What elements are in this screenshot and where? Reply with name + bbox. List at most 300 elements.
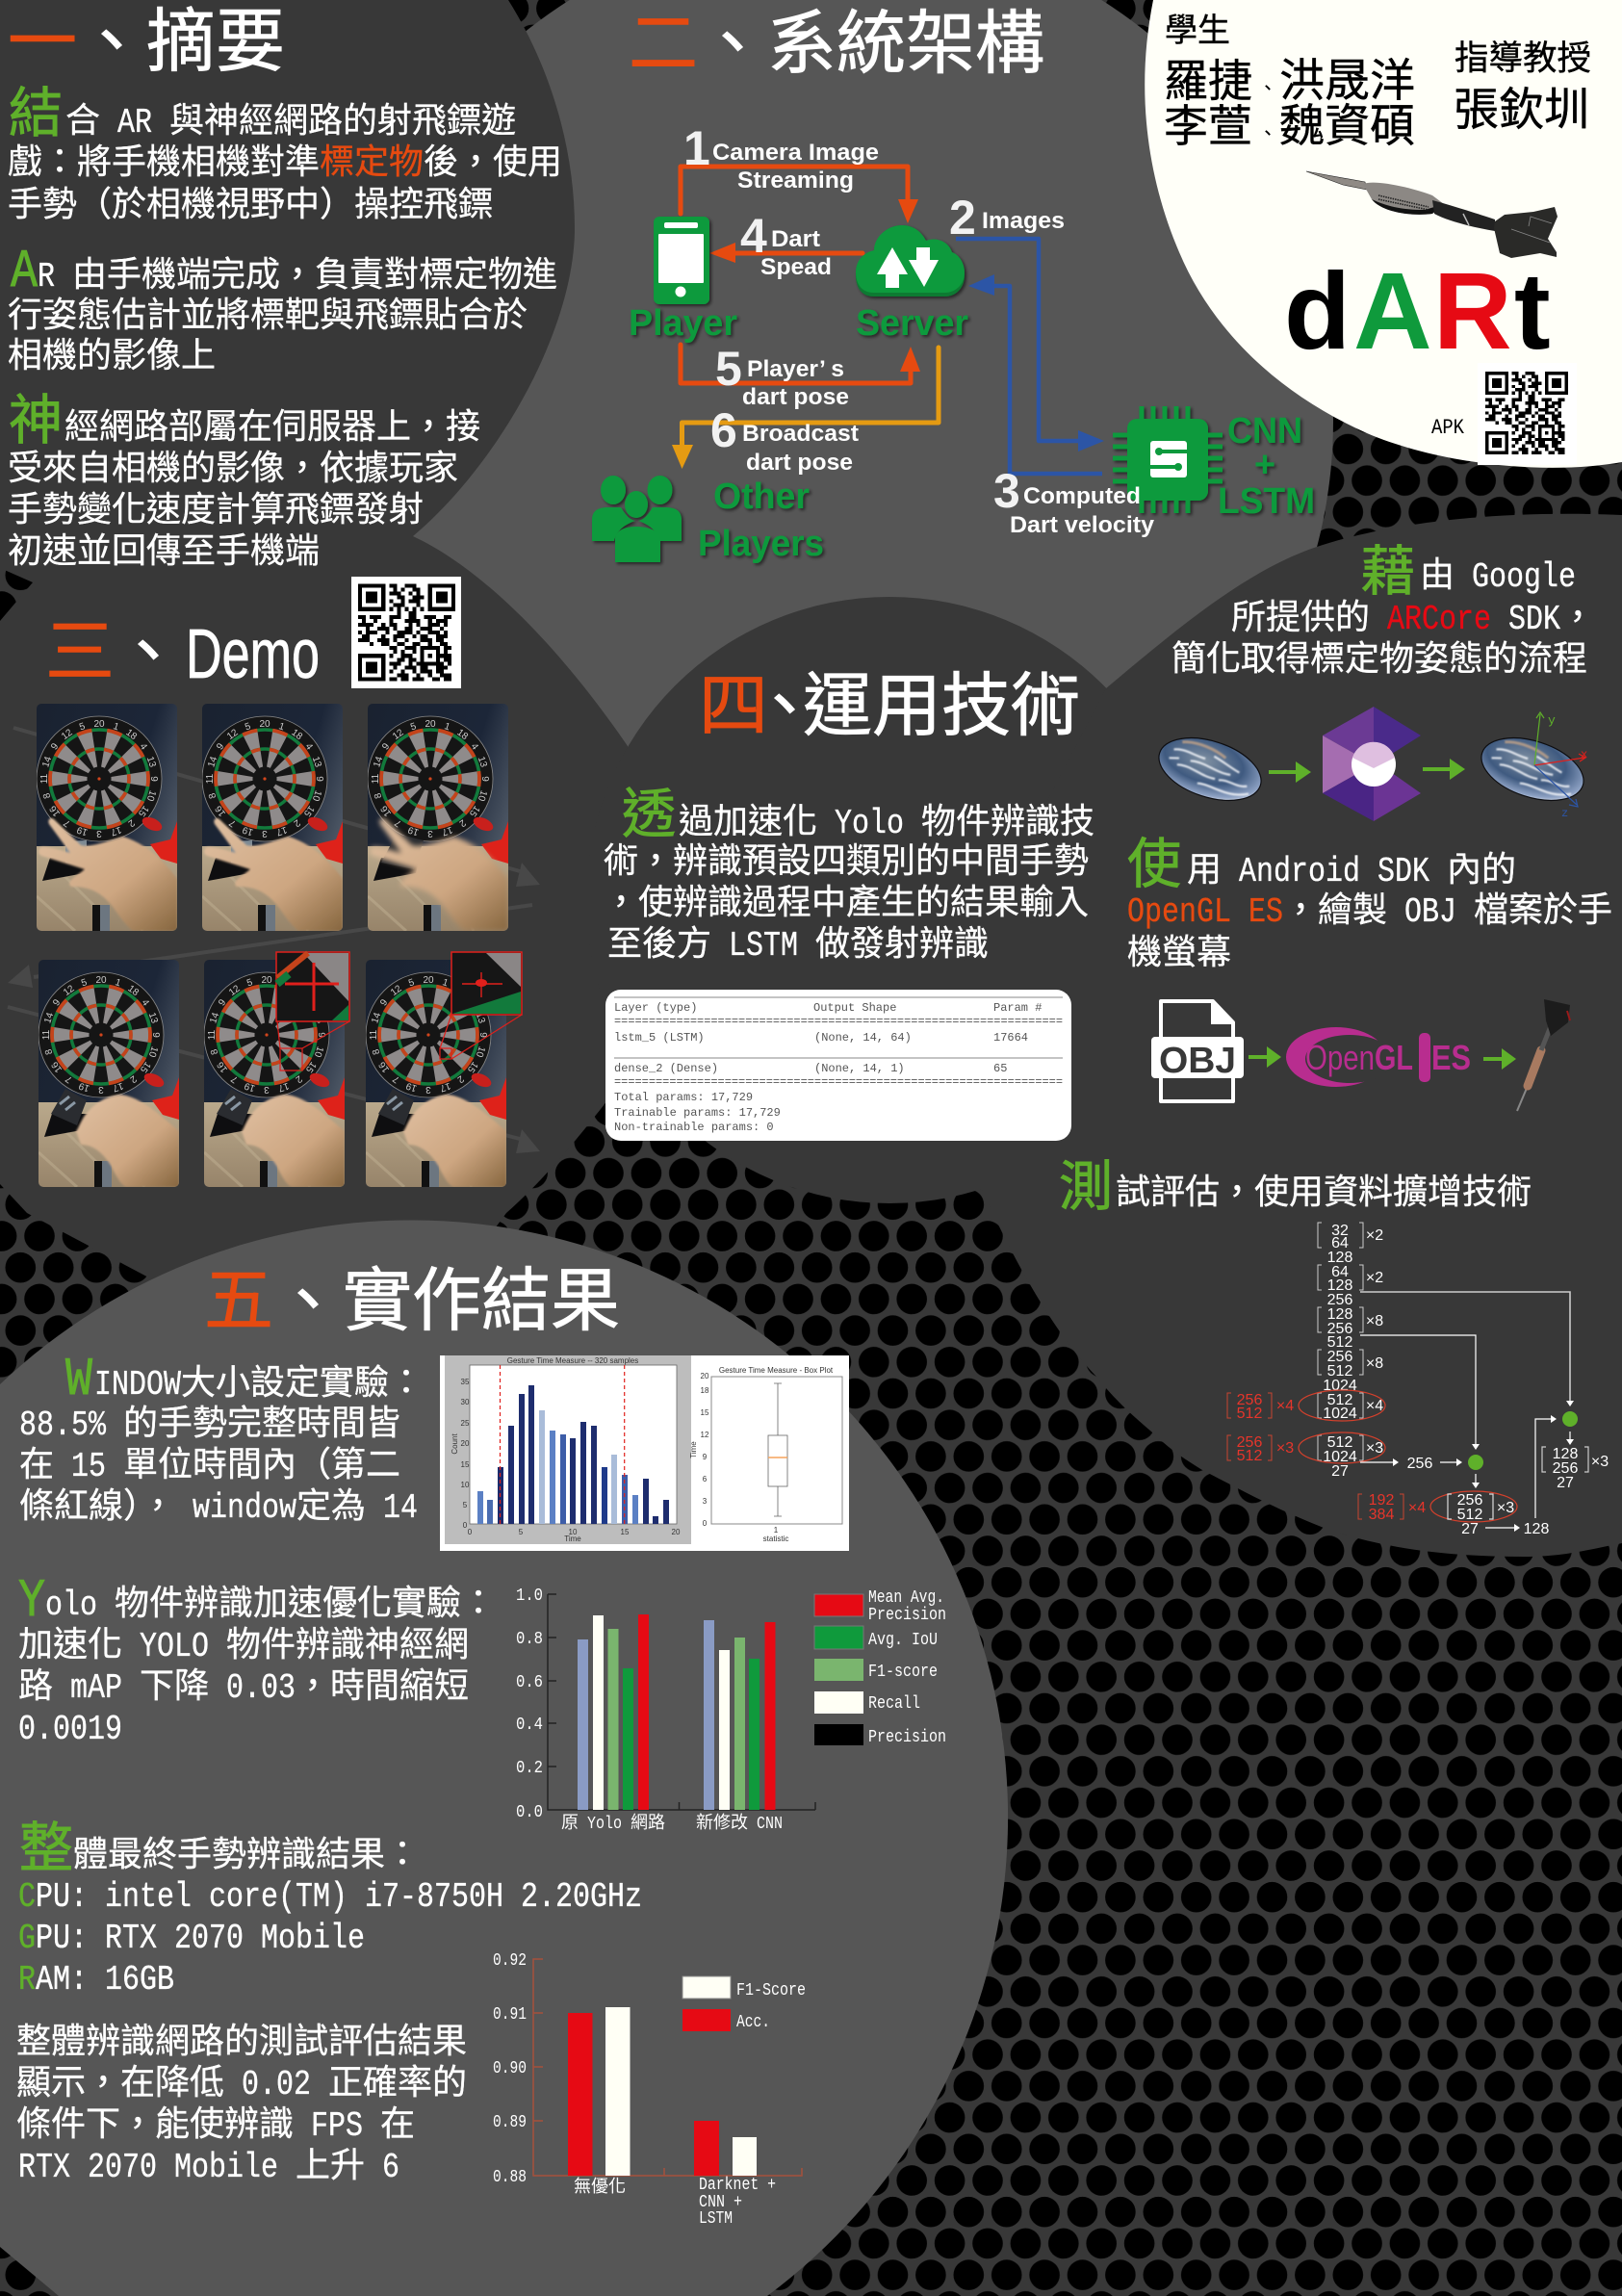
table: LSTM model summary: lstm_5 (LSTM)	[614, 1031, 705, 1045]
text block: OpenGL ES: OpenGL ES	[1127, 892, 1283, 932]
bar chart: overall evaluation: LSTM	[699, 2209, 733, 2229]
text block: window experiment: 定為	[296, 1486, 366, 1528]
table: LSTM model summary: 17664	[993, 1031, 1028, 1045]
bar chart: Yolo comparison	[516, 1587, 946, 1834]
modified layers in red: 256	[1237, 1434, 1262, 1451]
icon: phone player	[654, 217, 709, 304]
team: students: 羅捷	[1164, 59, 1252, 110]
bar chart: Yolo comparison: Precision	[868, 1728, 946, 1747]
title: abstract: 一、摘要	[8, 6, 285, 87]
modified layers in red	[1227, 1390, 1517, 1523]
text block: final results: 上升	[296, 2147, 365, 2187]
text block: abstract: 手勢（於相機視野中）操控飛鏢	[8, 185, 493, 226]
branch numbers: 256	[1457, 1492, 1482, 1509]
text block: ARCore: 藉	[1361, 544, 1415, 606]
logo: ARCore	[1323, 707, 1421, 821]
labels: diagram step captions: dart pose	[742, 384, 849, 410]
box plot: gesture time: Time	[689, 1441, 698, 1458]
text block: Yolo experiment: 下降	[140, 1666, 209, 1708]
text block: final results: 顯示，在降低	[16, 2063, 224, 2104]
text block: abstract: 結	[9, 86, 63, 148]
backbone numbers: ×8	[1366, 1355, 1383, 1372]
labels: diagram step captions: Dart velocity	[1010, 512, 1155, 538]
branch numbers: 27	[1461, 1521, 1479, 1537]
bar chart: overall evaluation: 0.90	[493, 2059, 527, 2078]
modified layers in red: ×3	[1276, 1440, 1294, 1457]
text block: window experiment: 88.5%	[19, 1406, 106, 1445]
text block: abstract: 行姿態估計並將標靶與飛鏢貼合於	[8, 296, 528, 337]
text block: final results: 正確率的	[328, 2063, 467, 2104]
modified layers in red: ×4	[1408, 1500, 1426, 1516]
icon: cloud server	[856, 225, 965, 297]
text block: final results: FPS	[311, 2106, 363, 2146]
arrow: player dart pose	[681, 345, 920, 383]
labels: diagram nodes: Other	[713, 477, 810, 517]
bar chart: Yolo comparison: 0.0	[516, 1803, 543, 1822]
text block: final results: 整體辨識網路的測試評估結果	[16, 2022, 467, 2063]
text block: final results: AM: 16GB	[36, 1960, 174, 1999]
team: advisor: 張欽圳	[1454, 87, 1589, 140]
table: LSTM model summary: Non-trainable params: 0	[614, 1121, 774, 1134]
backbone numbers: 1024	[1323, 1378, 1357, 1394]
arrow: to OpenGL	[1249, 1046, 1281, 1068]
text block: final results: PU: RTX 2070 Mobile	[36, 1919, 365, 1958]
text block: final results: R	[18, 1960, 36, 1999]
text block: Yolo experiment: YOLO	[140, 1627, 209, 1666]
arrow: to pose result	[1423, 759, 1465, 780]
text block: window experiment: 大小設定實驗：	[181, 1363, 424, 1405]
text block: data augmentation	[1059, 1159, 1532, 1222]
box plot: gesture time: 6	[703, 1475, 708, 1483]
text block: Yolo experiment: 0.03	[226, 1668, 296, 1708]
team: advisor: 指導教授	[1455, 39, 1591, 80]
backbone numbers: 64	[1331, 1264, 1349, 1280]
bar chart: Yolo comparison: Avg. IoU	[868, 1631, 938, 1650]
bar chart: gesture time histogram: 35	[461, 1378, 470, 1386]
branch numbers: ×3	[1497, 1500, 1514, 1516]
text block: abstract	[8, 86, 562, 573]
icon: chip network	[1113, 406, 1223, 513]
chart image: gesture time measure	[440, 1355, 849, 1551]
team: advisor	[1454, 39, 1591, 140]
bar chart: Yolo comparison: Precision	[868, 1606, 946, 1625]
text block: ARCore: Google	[1472, 557, 1576, 597]
image: earth with axes: y	[1548, 713, 1556, 728]
bar chart: gesture time histogram: 0	[463, 1521, 468, 1530]
text block: final results: G	[18, 1919, 36, 1958]
text block: Yolo acceleration: LSTM	[729, 926, 798, 966]
text block: OpenGL ES	[1127, 837, 1612, 974]
flow: OBJ rendering	[1151, 999, 1570, 1111]
text block: window experiment: 14	[383, 1488, 418, 1528]
text block: Yolo experiment: 物件辨識神經網	[226, 1625, 469, 1666]
text block: Yolo experiment: 0.0019	[18, 1710, 122, 1749]
backbone numbers: 64	[1331, 1235, 1349, 1251]
backbone numbers: 512	[1327, 1392, 1352, 1408]
text block: OpenGL ES: 檔案於手	[1474, 890, 1612, 932]
bar chart: Yolo comparison: F1-score	[868, 1663, 938, 1682]
text block: abstract: 由手機端完成，負責對標定物進	[72, 255, 557, 297]
logo: dARt: A	[1353, 250, 1432, 372]
image: earth with axes	[1474, 712, 1591, 820]
title: applied technology: 四	[699, 672, 768, 751]
text block: window experiment: 單位時間內（第二	[123, 1445, 400, 1486]
text block: ARCore: 所提供的	[1231, 598, 1370, 639]
labels: diagram nodes	[629, 303, 1315, 564]
text block: window experiment: 的手勢完整時間皆	[123, 1404, 400, 1445]
title: applied technology: 運用技術	[803, 671, 1080, 751]
team: students: 、	[1259, 81, 1276, 100]
text block: Yolo acceleration: 物件辨識技	[921, 802, 1094, 843]
text block: abstract: R	[38, 257, 55, 297]
backbone numbers: 256	[1327, 1292, 1352, 1308]
panel: system architecture background	[338, 0, 1333, 918]
box plot: gesture time: statistic	[763, 1535, 788, 1543]
labels: diagram step captions: dart pose	[746, 450, 853, 476]
labels: diagram step numbers: 4	[740, 209, 767, 263]
table: LSTM model summary: Output Shape	[813, 1001, 896, 1015]
text block: OpenGL ES: 內的	[1447, 850, 1516, 891]
text block: window experiment: 15	[71, 1447, 106, 1486]
bar chart: gesture time histogram: Time	[564, 1535, 581, 1543]
box plot: gesture time: 12	[701, 1431, 709, 1439]
image: dart	[1306, 171, 1558, 258]
table: LSTM model summary: Total params: 17,729	[614, 1091, 753, 1104]
text block: final results: C	[18, 1877, 36, 1917]
text block: abstract: 相機的影像上	[8, 336, 216, 377]
logo: dARt: R	[1433, 250, 1512, 372]
backbone numbers: 512	[1327, 1434, 1352, 1451]
text block: Yolo experiment: olo	[45, 1586, 97, 1625]
labels: diagram step captions: Dart	[771, 226, 820, 252]
text block: abstract: 與神經網路的射飛鏢遊	[169, 101, 516, 142]
text block: OpenGL ES: 用	[1187, 852, 1222, 891]
bar chart: gesture time histogram: Count	[451, 1433, 459, 1455]
bar chart: gesture time histogram: 30	[461, 1398, 470, 1406]
text block: final results	[16, 1820, 642, 2187]
bar chart: overall evaluation: 0.91	[493, 2005, 527, 2025]
box plot: gesture time: 1	[774, 1526, 779, 1535]
backbone numbers: 128	[1327, 1306, 1352, 1323]
bar chart: gesture time histogram: 20	[461, 1439, 470, 1448]
labels: diagram step captions: Player’ s	[747, 356, 844, 382]
flow: ARCore pose estimation	[1151, 707, 1591, 821]
photo: open hand 1	[37, 704, 177, 931]
text block: Yolo acceleration: 過加速化	[679, 802, 817, 843]
modified layers in red: 384	[1369, 1507, 1394, 1523]
bar chart: Yolo comparison: 原	[561, 1814, 579, 1834]
text block: final results: 6	[382, 2148, 399, 2187]
icon: OBJ file	[1151, 1001, 1244, 1101]
box plot: gesture time: Gesture Time Measure - Box Plot	[719, 1366, 834, 1375]
text block: ARCore: ARCore	[1387, 600, 1491, 639]
labels: diagram nodes: Player	[629, 303, 737, 344]
text block: Yolo acceleration: 做發射辨識	[815, 924, 989, 966]
bar chart: overall evaluation: 0.88	[493, 2168, 527, 2187]
table: LSTM model summary: Trainable params: 17,729	[614, 1106, 781, 1120]
logo: OpenGL ES: GL	[1375, 1038, 1413, 1077]
QR code: APK download: APK	[1431, 416, 1465, 440]
branch numbers	[1407, 1446, 1609, 1537]
team: students	[1164, 13, 1415, 156]
backbone numbers: ×4	[1366, 1398, 1383, 1414]
image: earth with axes: x	[1581, 748, 1587, 761]
title: results: 五、實作結果	[204, 1265, 620, 1346]
backbone numbers: 256	[1327, 1321, 1352, 1337]
bar chart: Yolo comparison: CNN	[757, 1815, 783, 1834]
text block: OpenGL ES: Android	[1239, 852, 1360, 891]
logo: dARt: d	[1284, 250, 1351, 372]
table: LSTM model summary: Param #	[993, 1001, 1042, 1015]
text block: OpenGL ES: ，繪製	[1283, 890, 1387, 932]
text block: Yolo acceleration: ，使辨識過程中產生的結果輸入	[604, 883, 1089, 924]
text block: data augmentation: 測	[1059, 1159, 1113, 1222]
panel: team information background	[1145, 0, 1622, 468]
backbone numbers: ×2	[1366, 1227, 1383, 1244]
modified layers in red: 192	[1369, 1492, 1394, 1509]
labels: diagram nodes: Server	[856, 303, 968, 344]
logo: OpenGL ES	[1286, 1027, 1471, 1087]
bar chart: overall evaluation: F1-Score	[736, 1981, 806, 2000]
text block: ARCore: SDK	[1508, 600, 1560, 639]
text block: Yolo experiment: Y	[18, 1570, 45, 1632]
labels: diagram nodes: CNN	[1227, 411, 1302, 451]
table: LSTM model summary: 65	[993, 1062, 1007, 1075]
panel: technology right background	[963, 514, 1622, 1557]
arrow: computed velocity	[968, 274, 1102, 474]
text block: Yolo experiment: 物件辨識加速優化實驗：	[115, 1584, 496, 1625]
bar chart: Yolo comparison: Mean Avg.	[868, 1588, 944, 1608]
backbone numbers: 512	[1327, 1334, 1352, 1351]
title: system architecture: 二、系統架構	[629, 9, 1044, 89]
table: LSTM model summary: =================================================================	[614, 1015, 1063, 1028]
photo: dart lands	[366, 960, 506, 1187]
detection branches	[1360, 1292, 1588, 1532]
branch numbers: 512	[1457, 1507, 1482, 1523]
team: students: 洪晟洋	[1279, 58, 1415, 111]
table: LSTM model summary: (None, 14, 64)	[814, 1031, 912, 1045]
inset: dart close-up one	[276, 952, 349, 1071]
bar chart: gesture time histogram	[445, 1355, 691, 1544]
text block: OpenGL ES: 使	[1127, 837, 1181, 899]
text block: Yolo acceleration: Yolo	[835, 804, 904, 843]
text block: window experiment: W	[65, 1349, 92, 1410]
labels: diagram nodes: +	[1254, 445, 1275, 485]
text block: Yolo experiment: ，時間縮短	[296, 1666, 469, 1708]
panel: abstract and demo background	[0, 0, 664, 1280]
backbone numbers: 1024	[1323, 1449, 1357, 1465]
branch numbers: 256	[1407, 1456, 1432, 1472]
text block: window experiment: window	[193, 1488, 296, 1528]
arrow: broadcast dart pose	[672, 348, 939, 469]
text block: ARCore	[1171, 544, 1595, 681]
text block: abstract: 初速並回傳至手機端	[8, 531, 320, 573]
photo: open hand 2	[202, 704, 343, 931]
bar chart: Yolo comparison: 0.4	[516, 1716, 543, 1735]
arrow: camera image streaming	[681, 167, 918, 223]
labels: diagram step captions: Spead	[760, 254, 832, 280]
text block: window experiment: 在	[19, 1446, 54, 1486]
table: LSTM model summary: (None, 14, 1)	[814, 1062, 905, 1075]
text block: window experiment: INDOW	[94, 1365, 181, 1405]
table: LSTM model summary: dense_2 (Dense)	[614, 1062, 718, 1075]
backbone numbers	[1318, 1223, 1383, 1480]
backbone numbers: 27	[1331, 1463, 1349, 1480]
bar chart: Yolo comparison: 網路	[631, 1813, 665, 1834]
labels: diagram step numbers: 1	[683, 121, 710, 175]
logo: dARt: t	[1514, 250, 1551, 372]
text block: abstract: 神	[9, 393, 63, 455]
QR code: APK download	[1431, 363, 1577, 465]
text block: Yolo experiment	[18, 1570, 496, 1749]
branch numbers: 256	[1553, 1460, 1578, 1477]
text block: abstract: 受來自相機的影像，依據玩家	[8, 449, 458, 490]
inset: dart close-up two	[440, 952, 522, 1059]
photo sequence: demo	[37, 704, 522, 1187]
table: LSTM model summary: Layer (type)	[614, 1001, 697, 1015]
photo: closed hand	[39, 960, 179, 1187]
QR code: demo video	[351, 577, 461, 688]
labels: diagram step numbers: 2	[949, 191, 976, 245]
text block: OpenGL ES: OBJ	[1404, 892, 1456, 932]
text block: Yolo experiment: 路	[18, 1666, 53, 1708]
text block: Yolo acceleration	[604, 787, 1094, 966]
title: demo	[45, 616, 320, 697]
bar chart: gesture time histogram: 20	[672, 1528, 681, 1536]
backbone numbers: ×2	[1366, 1270, 1383, 1286]
bar chart: overall evaluation: 0.89	[493, 2113, 527, 2132]
box plot: gesture time: 18	[701, 1386, 709, 1395]
text block: abstract: 合	[65, 101, 100, 142]
text block: final results: PU: intel core(TM) i7-8750H 2.20GHz	[36, 1877, 642, 1917]
title: applied technology: 、	[750, 672, 819, 751]
icon: other players	[592, 476, 682, 562]
text block: final results: 在	[380, 2105, 415, 2146]
text block: abstract: 手勢變化速度計算飛鏢發射	[8, 490, 424, 531]
labels: diagram step captions: Streaming	[737, 168, 854, 193]
bar chart: gesture time histogram: Gesture Time Measure -- 320 samples	[507, 1356, 638, 1365]
arrow: to dart model	[1483, 1048, 1516, 1070]
photo: moving hand	[368, 704, 508, 931]
text block: ARCore: 由	[1420, 556, 1455, 597]
branch numbers: 128	[1553, 1446, 1578, 1462]
text block: window experiment	[19, 1349, 424, 1528]
table: LSTM model summary	[605, 990, 1071, 1141]
labels: diagram step captions: Broadcast	[742, 421, 859, 447]
diagram: network architecture	[1227, 1223, 1609, 1537]
text block: abstract: 經網路部屬在伺服器上，接	[64, 407, 480, 449]
backbone numbers: 32	[1331, 1223, 1349, 1239]
bar chart: Yolo comparison: Recall	[868, 1694, 920, 1714]
backbone numbers: 128	[1327, 1250, 1352, 1266]
photo: dart appears	[204, 960, 345, 1187]
backbone numbers: 1024	[1323, 1406, 1357, 1422]
bar chart: Yolo comparison: 0.8	[516, 1630, 543, 1649]
text block: ARCore: 簡化取得標定物姿態的流程	[1171, 639, 1587, 681]
box plot: gesture time: 0	[703, 1519, 708, 1528]
text block: final results: RTX 2070 Mobile	[18, 2148, 278, 2187]
bar chart: overall evaluation: 無優化	[574, 2177, 626, 2198]
bar chart: gesture time histogram: 10	[461, 1481, 470, 1489]
image: earth with axes: z	[1561, 807, 1568, 820]
text block: ARCore: ，	[1560, 600, 1595, 639]
modified layers in red: 512	[1237, 1448, 1262, 1464]
logo: OpenGL ES: ES	[1431, 1038, 1471, 1077]
text block: OpenGL ES: SDK	[1377, 852, 1429, 891]
labels: diagram step captions: Images	[982, 208, 1065, 234]
branch numbers: 27	[1557, 1475, 1574, 1491]
box plot: gesture time	[689, 1366, 842, 1543]
text block: Yolo experiment: mAP	[70, 1668, 122, 1708]
backbone numbers: 128	[1327, 1277, 1352, 1294]
text block: final results: 0.02	[242, 2065, 311, 2104]
labels: diagram step captions: Computed	[1023, 483, 1141, 509]
diagram: system architecture	[592, 121, 1315, 564]
bar chart: Yolo comparison: 0.6	[516, 1673, 543, 1692]
text block: OpenGL ES: 機螢幕	[1127, 933, 1231, 974]
backbone numbers: ×8	[1366, 1313, 1383, 1329]
arrow: images to network	[956, 239, 1104, 451]
bar chart: gesture time histogram: 5	[519, 1528, 524, 1536]
backbone numbers: 512	[1327, 1363, 1352, 1380]
text block: window experiment: 條紅線），	[19, 1486, 175, 1528]
bar chart: gesture time histogram: 15	[621, 1528, 630, 1536]
text block: data augmentation: 試評估，使用資料擴增技術	[1116, 1173, 1532, 1214]
bar chart: gesture time histogram: 15	[461, 1460, 470, 1469]
text block: Yolo acceleration: 至後方	[607, 924, 711, 966]
title: demo: 三	[45, 618, 115, 697]
bar chart: Yolo comparison: Yolo	[587, 1815, 622, 1834]
team: students: 魏資碩	[1279, 103, 1415, 156]
text block: abstract: 戲：將手機相機對準標定物後，使用	[8, 142, 562, 184]
bar chart: gesture time histogram: 25	[461, 1419, 470, 1428]
arrow: to ARCore	[1269, 761, 1311, 783]
panel: results background	[0, 1220, 1008, 2296]
text block: Yolo acceleration: 術，辨識預設四類別的中間手勢	[604, 841, 1089, 883]
bar chart: overall evaluation: 0.92	[493, 1951, 527, 1971]
panel: technology heading background	[586, 597, 1193, 1203]
box plot: gesture time: 9	[703, 1453, 708, 1461]
labels: diagram nodes: Players	[698, 524, 824, 564]
bar chart: overall evaluation: CNN +	[699, 2193, 742, 2212]
arrow: dart speed	[709, 243, 862, 263]
labels: diagram step captions	[712, 140, 1155, 538]
text block: Yolo acceleration: 透	[622, 787, 676, 849]
bar chart: overall evaluation: Acc.	[736, 2013, 770, 2032]
text block: abstract: AR	[117, 103, 152, 142]
text block: final results: 條件下，能使辨識	[16, 2104, 294, 2146]
box plot: gesture time: 15	[701, 1408, 709, 1417]
bar chart: overall evaluation	[493, 1951, 806, 2229]
text block: final results: 體最終手勢辨識結果：	[73, 1835, 420, 1876]
backbone numbers: ×3	[1366, 1440, 1383, 1457]
modified layers in red: 256	[1237, 1392, 1262, 1408]
text block: final results: 整	[19, 1820, 73, 1883]
logo: OpenGL ES: Open	[1305, 1038, 1375, 1077]
title: demo: 、	[114, 618, 183, 697]
bar chart: gesture time histogram: 10	[569, 1528, 578, 1536]
table: LSTM model summary: =================================================================	[614, 1075, 1063, 1089]
modified layers in red: 512	[1237, 1406, 1262, 1422]
logo: dARt	[1284, 250, 1551, 372]
bar chart: overall evaluation: Darknet +	[699, 2176, 776, 2195]
bar chart: gesture time histogram: 5	[463, 1501, 468, 1509]
labels: diagram step numbers	[683, 121, 1020, 518]
text block: abstract: A	[11, 241, 38, 302]
team: students: 學生	[1165, 13, 1230, 52]
image: dart model	[1517, 999, 1570, 1111]
labels: diagram step numbers: 3	[993, 464, 1020, 518]
